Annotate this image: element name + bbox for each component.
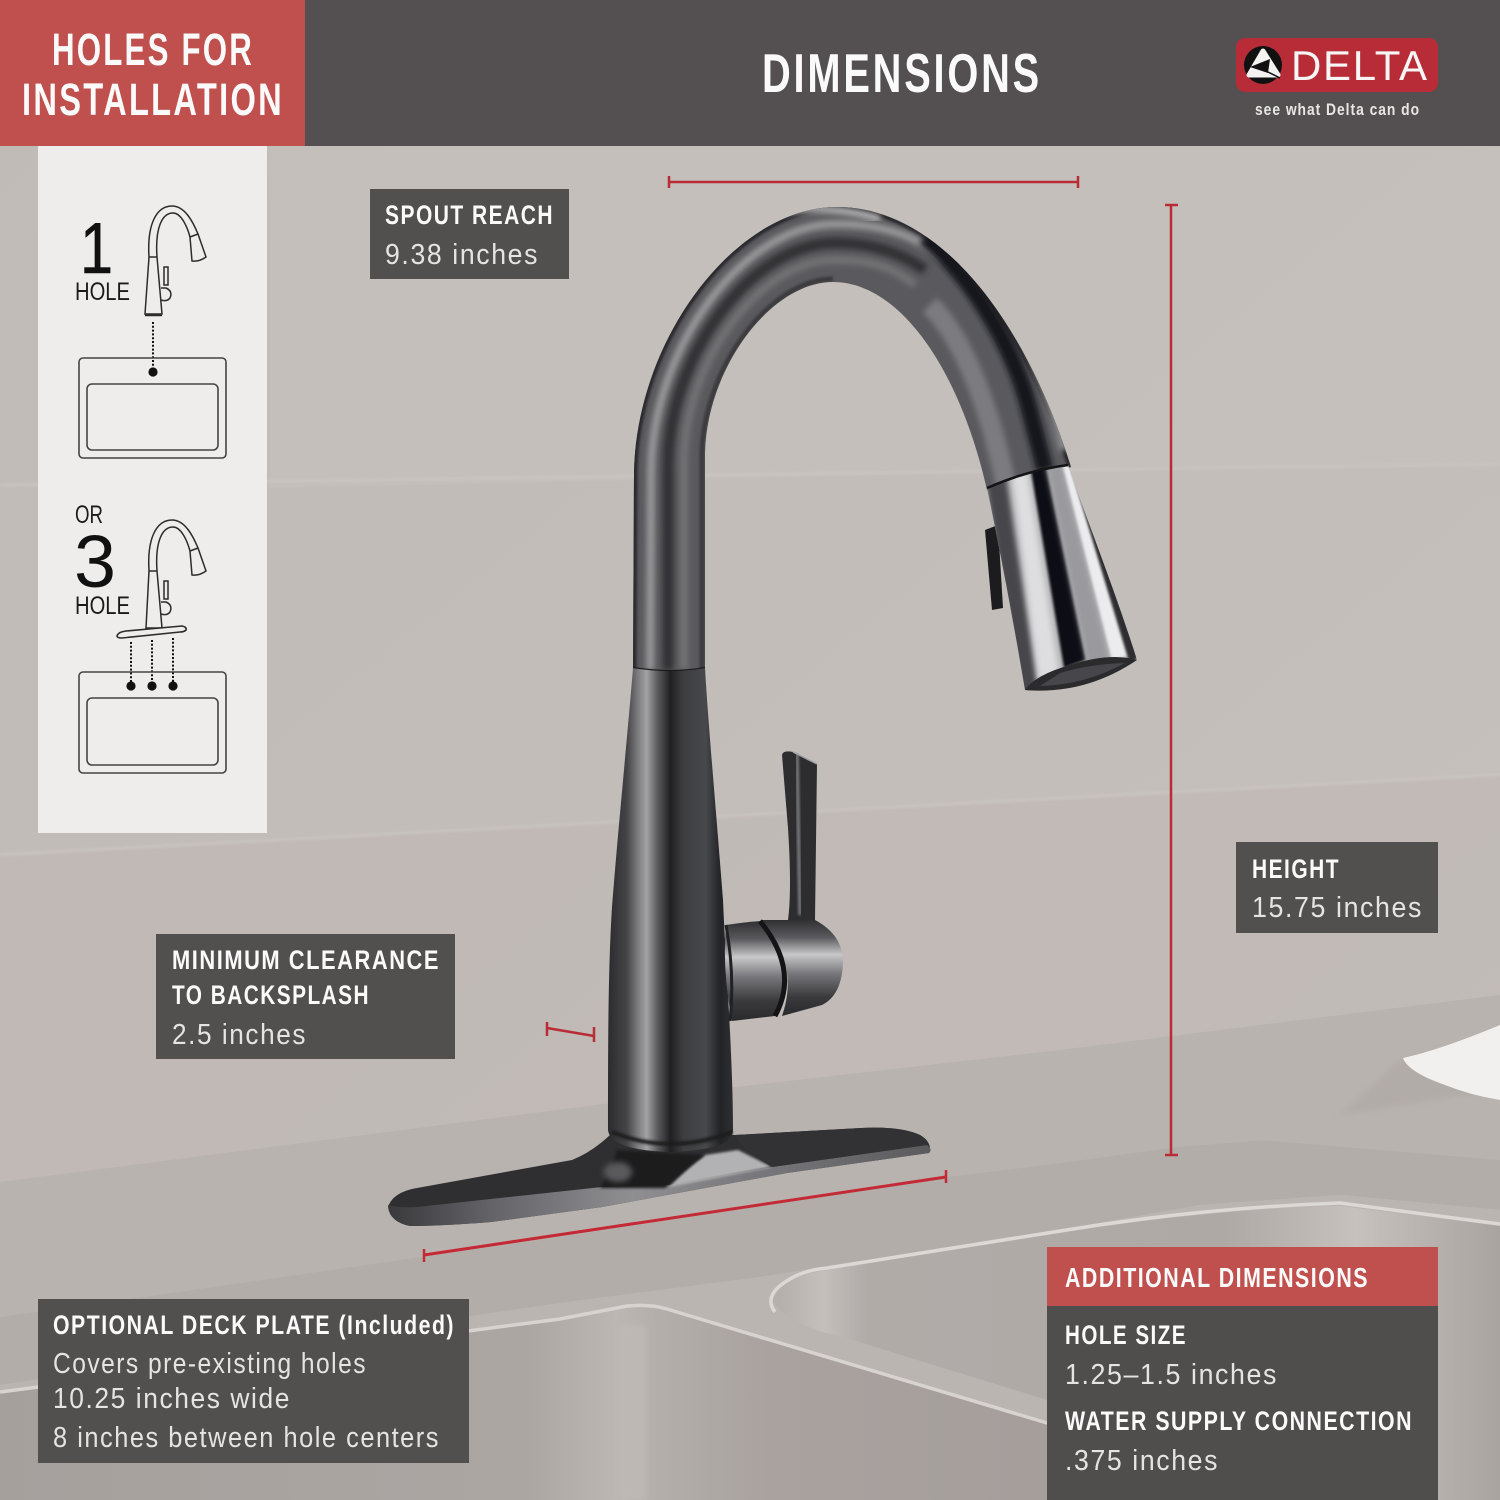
dimension line: spout reach [669,176,1078,188]
option: three hole: OR [75,501,103,529]
option: one hole: 1 [80,209,113,289]
label: optional deck plate [38,1299,469,1463]
label: optional deck plate: 8 inches between hole centers [53,1422,440,1454]
label: minimum clearance [156,934,455,1059]
option: three hole: 3 [74,520,116,603]
option: one hole [75,206,226,458]
panel: hole options sidebar [38,146,267,833]
spray head [985,462,1140,700]
deck plate [388,1128,931,1226]
label: optional deck plate: 10.25 inches wide [53,1383,291,1415]
icon: sink with one hole [79,322,226,458]
panel: additional dimensions: HOLE SIZE [1065,1320,1187,1350]
icon: sink with three holes [79,638,226,773]
option: three hole: HOLE [75,592,130,620]
right sink basin [770,1206,1500,1500]
red title tab: holes for installation: INSTALLATION [22,74,284,125]
label: spout reach [370,189,569,279]
label: height: HEIGHT [1252,854,1340,884]
panel: additional dimensions: 1.25–1.5 inches [1065,1359,1278,1391]
icon: faucet [145,206,206,315]
dimension line: backsplash clearance [547,1022,594,1042]
label: spout reach: SPOUT REACH [385,200,554,230]
header: dimensions title: DIMENSIONS [762,42,1042,104]
panel: additional dimensions: WATER SUPPLY CONNECTION [1065,1406,1413,1436]
logo: Delta: see what Delta can do [1255,100,1420,119]
spout [633,207,1076,671]
lower rim [0,1195,1500,1500]
label: height: 15.75 inches [1252,892,1423,924]
handle lever [782,751,817,920]
option: three hole [74,501,226,773]
label: height [1236,842,1438,933]
label: minimum clearance: 2.5 inches [172,1019,307,1051]
header bar [305,0,1500,146]
faucet body [608,668,733,1152]
red title tab: holes for installation [0,0,305,146]
counter top plane [0,995,1500,1317]
label: optional deck plate: OPTIONAL DECK PLATE (Included) [53,1310,455,1340]
red title tab: holes for installation: HOLES FOR [52,24,254,75]
label: optional deck plate: Covers pre-existing holes [53,1348,367,1380]
panel: additional dimensions: ADDITIONAL DIMENSIONS [1065,1262,1369,1293]
logo: Delta: DELTA [1291,42,1427,89]
handle hub [725,920,843,1021]
logo: Delta [1236,38,1438,119]
countertop and sinks [0,995,1500,1500]
dimension line: deck plate width [424,1170,946,1262]
label: minimum clearance: MINIMUM CLEARANCE [172,945,440,975]
label: minimum clearance: TO BACKSPLASH [172,980,370,1010]
left sink basin [0,1307,1300,1500]
panel: additional dimensions: .375 inches [1065,1445,1219,1477]
counter front edge [0,1140,1500,1385]
faucet photo [388,207,1140,1226]
dimension line: height [1165,205,1178,1155]
white dish at right edge [1403,1025,1500,1100]
label: spout reach: 9.38 inches [385,239,539,271]
panel: additional dimensions [1047,1247,1438,1500]
option: one hole: HOLE [75,278,130,306]
icon: faucet with deck plate [117,520,206,638]
